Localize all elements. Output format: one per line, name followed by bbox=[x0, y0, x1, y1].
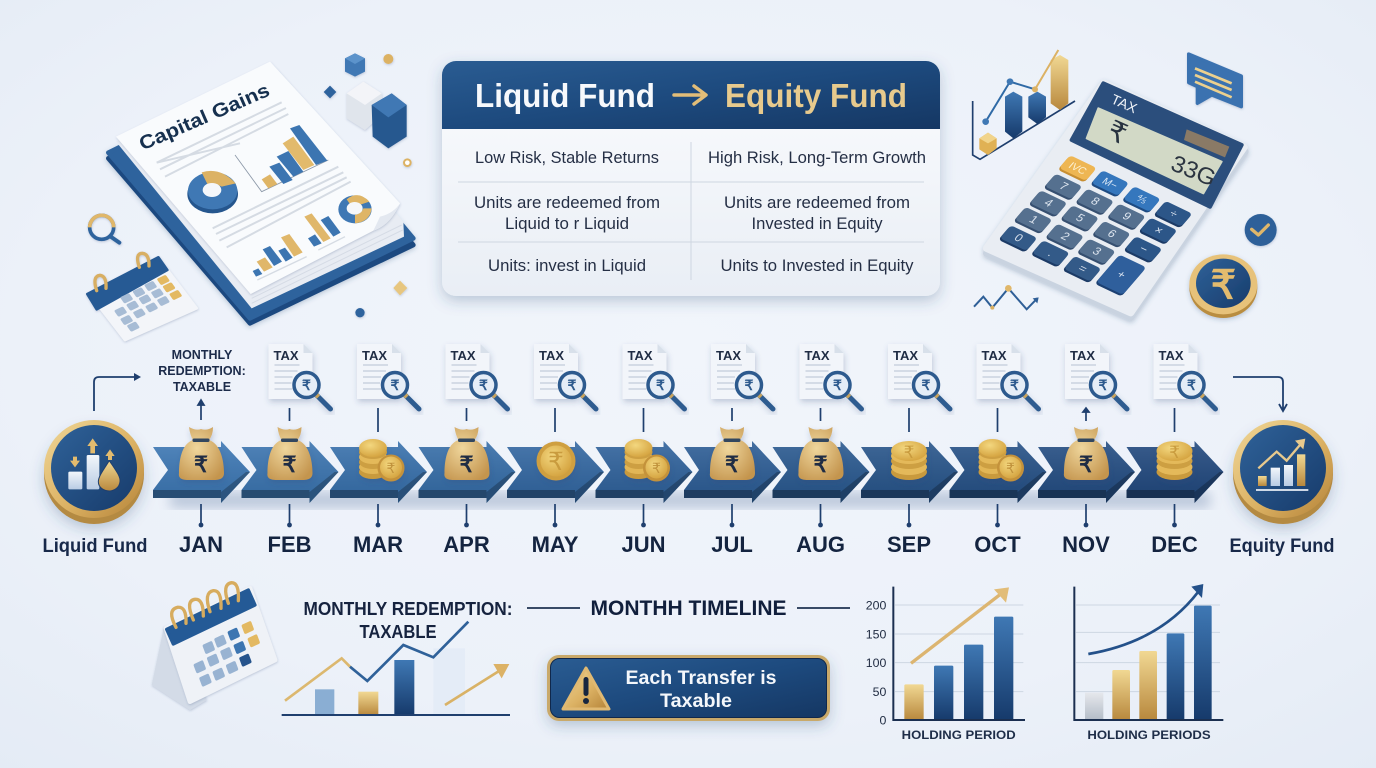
month: OCT bbox=[950, 344, 1046, 557]
month: DEC: ₹ bbox=[1187, 377, 1196, 393]
month: DEC: ₹ bbox=[1169, 443, 1180, 462]
icon: desk calendar bbox=[152, 583, 275, 710]
calculator keys: IVC bbox=[1066, 161, 1089, 177]
badge: equity fund bbox=[1233, 420, 1333, 524]
month: JUN: TAX bbox=[628, 348, 653, 363]
label: equity fund: Equity Fund bbox=[1230, 535, 1334, 557]
calculator keys: 5 bbox=[1073, 211, 1088, 225]
month: JUN bbox=[596, 344, 692, 557]
calculator body bbox=[987, 83, 1245, 317]
month: NOV bbox=[1038, 344, 1135, 557]
month: FEB: ₹ bbox=[302, 377, 311, 393]
month: JUN: ₹ bbox=[652, 460, 661, 476]
calculator keys: = bbox=[1075, 262, 1091, 275]
month: DEC: TAX bbox=[1158, 348, 1184, 363]
label: liquid fund: Liquid Fund bbox=[42, 535, 148, 557]
month: MAY: ₹ bbox=[568, 377, 577, 393]
month: JUN: JUN bbox=[621, 532, 666, 557]
bar chart: holding period: 200 bbox=[866, 598, 886, 612]
heading: monthly redemption taxable: TAXABLE bbox=[360, 622, 436, 642]
month: SEP: ₹ bbox=[922, 377, 931, 393]
calculator keys bbox=[998, 155, 1192, 297]
mini zigzag line bbox=[974, 285, 1039, 310]
calculator keys: 7 bbox=[1056, 179, 1071, 193]
paper stack bbox=[116, 67, 404, 308]
month: OCT: ₹ bbox=[1010, 377, 1019, 393]
icon: warning triangle bbox=[563, 668, 609, 709]
comparison text: High Risk, Long-Term Growth bbox=[708, 148, 926, 167]
calculator keys: M− bbox=[1099, 177, 1120, 191]
calculator keys: × bbox=[1151, 223, 1167, 237]
calculator keys: 8 bbox=[1088, 194, 1103, 208]
comparison text: Invested in Equity bbox=[752, 214, 883, 233]
month: JAN: JAN bbox=[179, 532, 223, 557]
month: NOV: NOV bbox=[1062, 532, 1110, 557]
panel header bbox=[442, 61, 940, 129]
month: NOV: ₹ bbox=[1079, 452, 1093, 477]
calculator keys: − bbox=[1136, 242, 1152, 256]
comparison text: Units to Invested in Equity bbox=[720, 256, 914, 275]
report lines top bbox=[157, 102, 288, 177]
month: NOV: TAX bbox=[1070, 348, 1095, 363]
comparison text: Units are redeemed from bbox=[474, 193, 660, 212]
illustration: tax calculator bbox=[973, 50, 1277, 318]
month: NOV: ₹ bbox=[1099, 377, 1108, 393]
callout: each transfer is taxable: Each Transfer is bbox=[626, 667, 777, 689]
month: MAR: ₹ bbox=[391, 377, 400, 393]
heading: monthly redemption taxable: MONTHLY REDEMPTION: bbox=[304, 599, 512, 619]
line chart: redemption trend bbox=[282, 622, 510, 715]
calculator keys: 3 bbox=[1090, 244, 1105, 258]
callout: monthly redemption taxable: MONTHLY bbox=[172, 348, 233, 362]
month: DEC: DEC bbox=[1151, 532, 1198, 557]
month: MAR: MAR bbox=[353, 532, 403, 557]
month: SEP bbox=[861, 344, 958, 557]
month: JAN bbox=[153, 400, 250, 557]
callout: monthly redemption taxable: REDEMPTION: bbox=[158, 364, 246, 378]
heading: month timeline: MONTHH TIMELINE bbox=[590, 597, 786, 620]
callout: each transfer is taxable: Taxable bbox=[660, 690, 732, 712]
calculator keys: 2 bbox=[1058, 229, 1073, 243]
month: AUG: TAX bbox=[804, 348, 830, 363]
month: SEP: TAX bbox=[893, 348, 918, 363]
month: JUN: ₹ bbox=[656, 377, 665, 393]
month: JUL: JUL bbox=[711, 532, 753, 557]
calculator keys: 9 bbox=[1120, 209, 1135, 223]
month: MAY: ₹ bbox=[548, 448, 564, 476]
comparison text: Liquid to r Liquid bbox=[505, 214, 629, 233]
month: FEB: FEB bbox=[268, 532, 312, 557]
calculator keys: ⅘ bbox=[1133, 194, 1149, 206]
bar chart: holding period: HOLDING PERIOD bbox=[902, 728, 1016, 742]
month: MAR: ₹ bbox=[387, 460, 396, 476]
report lines bottom bbox=[213, 167, 351, 247]
ribbon shadow bbox=[170, 492, 1210, 508]
month: JUL: ₹ bbox=[725, 452, 739, 477]
donut chart bbox=[187, 171, 238, 213]
comparison text bbox=[474, 148, 926, 275]
bar chart: holding period: 100 bbox=[866, 656, 886, 670]
callout: monthly redemption taxable: TAXABLE bbox=[173, 380, 231, 394]
icon: growth chart bbox=[1256, 439, 1308, 490]
decorative cubes bbox=[324, 53, 411, 317]
calculator rupee: ₹ bbox=[1103, 114, 1132, 150]
month: APR: ₹ bbox=[460, 452, 474, 477]
month: JUL bbox=[684, 344, 781, 557]
illustration: capital gains report bbox=[87, 53, 413, 340]
callout: each transfer is taxable bbox=[547, 655, 830, 721]
calculator keys: + bbox=[1114, 268, 1129, 281]
bar chart: holding period: 150 bbox=[866, 627, 886, 641]
badge: liquid fund bbox=[44, 420, 144, 524]
calculator keys: 6 bbox=[1105, 227, 1120, 240]
main report sheet bbox=[116, 62, 400, 294]
calculator keys: . bbox=[1045, 247, 1057, 259]
rising bar chart bbox=[973, 50, 1075, 159]
report title: Capital Gains bbox=[136, 80, 273, 155]
bar chart on report bbox=[235, 125, 328, 192]
month: AUG: AUG bbox=[796, 532, 845, 557]
bar chart: holding periods: HOLDING PERIODS bbox=[1087, 728, 1211, 742]
bar chart: holding period bbox=[866, 587, 1025, 742]
month: APR: APR bbox=[443, 532, 490, 557]
arrow: start of flow bbox=[94, 373, 141, 411]
month: FEB bbox=[242, 344, 338, 557]
calculator keys: 1 bbox=[1026, 213, 1041, 226]
icon: check badge bbox=[1245, 214, 1277, 246]
rupee glyph: ₹ bbox=[1211, 264, 1236, 308]
panel body bbox=[442, 61, 940, 296]
arrow: liquid to equity bbox=[674, 86, 706, 104]
bar chart: holding periods bbox=[1074, 584, 1223, 742]
month: AUG: ₹ bbox=[814, 452, 828, 477]
calculator label: TAX bbox=[1109, 91, 1140, 117]
heading: liquid fund: Liquid Fund bbox=[475, 77, 655, 114]
month: MAR: TAX bbox=[362, 348, 387, 363]
month: OCT: OCT bbox=[974, 532, 1021, 557]
small bars left bbox=[253, 234, 307, 280]
calculator keys: ÷ bbox=[1166, 207, 1182, 220]
month: MAY: TAX bbox=[539, 348, 564, 363]
calculator keys: 0 bbox=[1011, 231, 1027, 245]
timeline: monthly redemption bbox=[153, 344, 1224, 557]
month: AUG bbox=[772, 344, 870, 557]
comparison text: Units: invest in Liquid bbox=[488, 256, 646, 275]
month: OCT: TAX bbox=[982, 348, 1007, 363]
arrow: end of flow bbox=[1233, 377, 1287, 411]
panel: liquid vs equity comparison bbox=[442, 61, 940, 296]
month: JAN: ₹ bbox=[194, 452, 208, 477]
month: SEP: SEP bbox=[887, 532, 931, 557]
comparison text: Low Risk, Stable Returns bbox=[475, 148, 659, 167]
calculator display panel bbox=[1072, 83, 1242, 207]
month: OCT: ₹ bbox=[1006, 460, 1015, 476]
calculator reading: 33G bbox=[1167, 150, 1220, 191]
month: JUL: ₹ bbox=[745, 377, 754, 393]
speech bubble bbox=[1189, 54, 1241, 107]
icon: magnifier bbox=[90, 215, 119, 243]
callout: monthly redemption taxable bbox=[158, 348, 246, 394]
month: DEC bbox=[1126, 344, 1224, 557]
icon: rupee coin bbox=[1189, 254, 1257, 318]
month: FEB: ₹ bbox=[282, 452, 296, 477]
month: JUL: TAX bbox=[716, 348, 741, 363]
heading: monthly redemption taxable bbox=[304, 599, 512, 642]
month: MAY: MAY bbox=[532, 532, 579, 557]
comparison text: Units are redeemed from bbox=[724, 193, 910, 212]
small bars right bbox=[304, 213, 345, 250]
month: AUG: ₹ bbox=[833, 377, 842, 393]
bar chart: holding period: 0 bbox=[879, 713, 886, 727]
small donut bbox=[338, 195, 372, 223]
calculator keys: 4 bbox=[1041, 196, 1057, 210]
month: FEB: TAX bbox=[274, 348, 299, 363]
month: APR: ₹ bbox=[479, 377, 488, 393]
bar chart: holding period: 50 bbox=[873, 685, 886, 699]
month: MAY bbox=[507, 344, 604, 557]
clipboard bbox=[108, 72, 413, 323]
icon: bars and drop bbox=[68, 438, 120, 491]
month: MAR bbox=[330, 344, 427, 557]
month: APR bbox=[418, 344, 516, 557]
icon: small calendar bbox=[87, 253, 197, 340]
month: SEP: ₹ bbox=[904, 443, 914, 462]
month: APR: TAX bbox=[450, 348, 476, 363]
heading: equity fund: Equity Fund bbox=[725, 77, 907, 114]
